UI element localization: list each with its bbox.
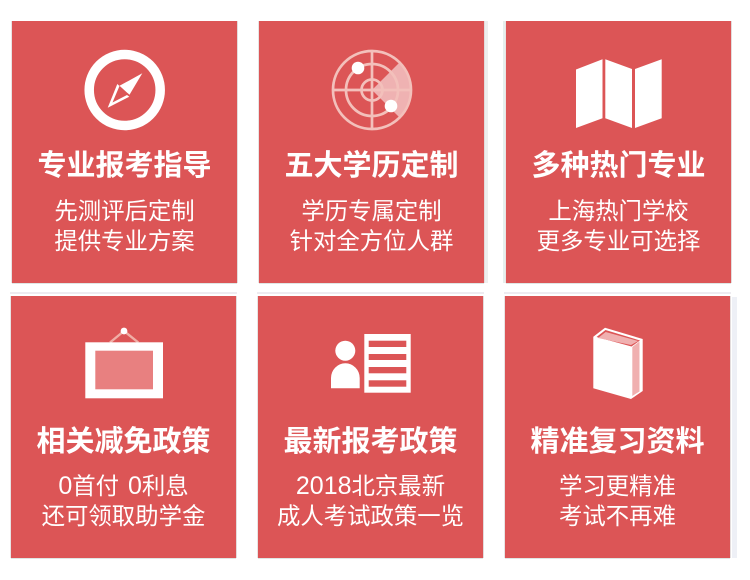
text block: 成人考试政策一览 xyxy=(277,503,464,529)
panel: study materials xyxy=(505,296,730,558)
text block: 学历专属定制 xyxy=(301,198,442,224)
panel: latest policy xyxy=(258,296,483,558)
panel: fee reduction xyxy=(11,296,236,558)
text block: 先测评后定制 xyxy=(54,198,195,224)
icon: folded map xyxy=(576,59,662,128)
text block: 0首付 0利息 xyxy=(58,472,189,500)
panel: five education levels xyxy=(259,21,484,283)
panel: popular majors xyxy=(506,21,731,283)
text block: 上海热门学校 xyxy=(548,198,689,224)
text block: 考试不再难 xyxy=(559,503,676,529)
text block xyxy=(559,473,676,529)
text block xyxy=(290,198,453,254)
heading: 最新报考政策 xyxy=(283,426,458,458)
text block xyxy=(537,198,700,254)
text block xyxy=(54,198,195,254)
text block xyxy=(277,472,464,529)
icon: radar xyxy=(332,50,412,130)
text block: 针对全方位人群 xyxy=(290,228,453,254)
icon: book xyxy=(593,328,643,399)
icon: hanging frame xyxy=(85,328,163,398)
text block: 还可领取助学金 xyxy=(42,503,205,529)
panel: professional guidance xyxy=(12,21,237,283)
text block xyxy=(42,472,205,529)
text block: 学习更精准 xyxy=(559,473,676,499)
heading: 精准复习资料 xyxy=(530,426,704,458)
heading: 五大学历定制 xyxy=(284,150,458,182)
heading: 多种热门专业 xyxy=(531,150,706,182)
text block: 更多专业可选择 xyxy=(537,228,700,254)
icon: compass xyxy=(84,50,165,130)
text block: 2018北京最新 xyxy=(296,472,445,500)
icon: person with document xyxy=(331,334,411,393)
heading: 专业报考指导 xyxy=(37,150,212,182)
heading: 相关减免政策 xyxy=(36,426,210,458)
text block: 提供专业方案 xyxy=(54,228,195,254)
